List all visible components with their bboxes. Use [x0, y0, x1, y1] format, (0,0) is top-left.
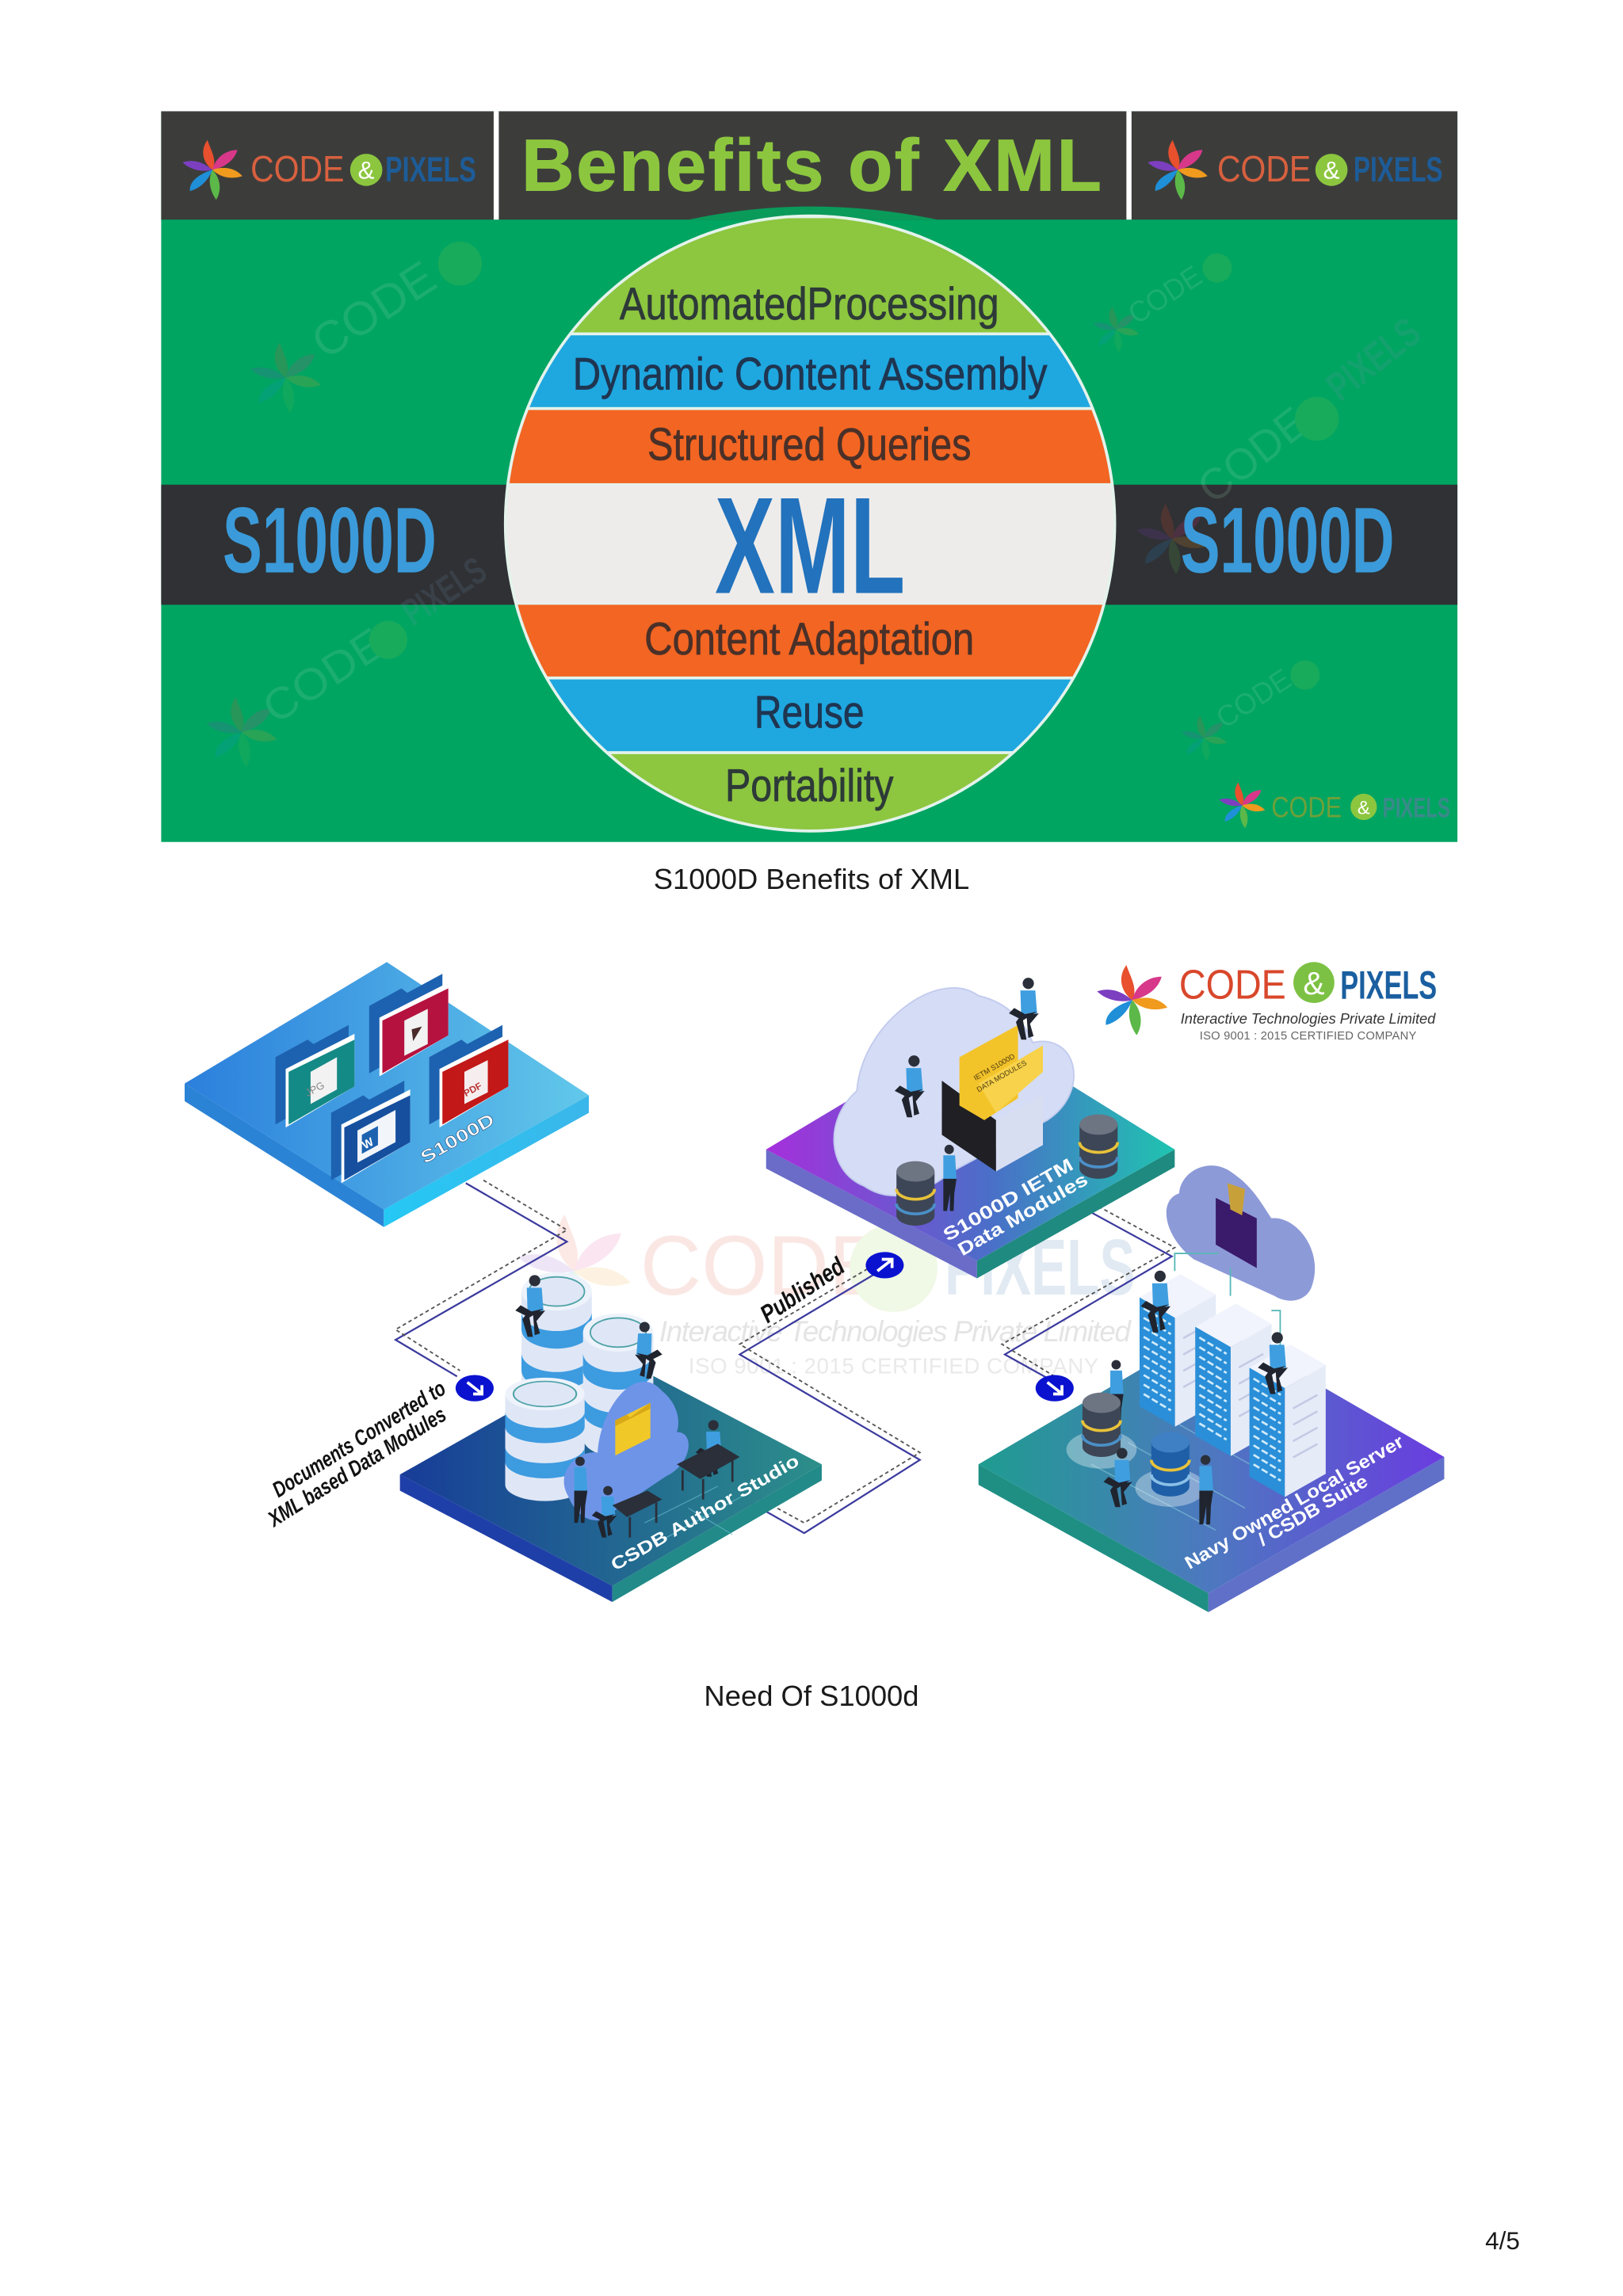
- glow under databases: [1067, 1431, 1205, 1507]
- person: standing: [943, 1145, 957, 1211]
- label: documents converted: XML based Data Modules: [262, 1402, 450, 1532]
- person: seated on database: [515, 1275, 545, 1337]
- logo: Code and Pixels: &: [1303, 965, 1325, 1001]
- icon: PDF folder: PDF: [462, 1080, 483, 1099]
- label: documents converted: Documents Converted to: [268, 1375, 450, 1502]
- watermarks on green: CODE: [1122, 259, 1208, 330]
- database: dark: [1083, 1393, 1121, 1457]
- platform: Navy Owned Local Server: [979, 1165, 1444, 1612]
- filing cabinet with data modules: IETM S1000D: [972, 1052, 1017, 1082]
- watermark: company logo: CODE: [640, 1218, 885, 1313]
- platform label: Navy server: Navy Owned Local Server: [1181, 1431, 1407, 1573]
- stripe: Automated Processing: [573, 218, 1047, 333]
- logo: banner bottom right: CODE: [1271, 791, 1342, 823]
- arrow badge: published: [865, 1252, 903, 1278]
- platform: CSDB Author Studio: [400, 1272, 822, 1602]
- logo: banner bottom right: [1220, 783, 1450, 828]
- database stack: back left: [521, 1272, 592, 1416]
- person: top of cloud: [1009, 978, 1039, 1039]
- platform label: CSDB Author Studio: CSDB Author Studio: [607, 1451, 803, 1574]
- watermarks on green: CODE: [254, 618, 394, 733]
- logo: banner bottom right: &: [1358, 798, 1370, 819]
- label: Portability: Portability: [725, 761, 894, 811]
- platform: S1000D source documents: [185, 962, 589, 1227]
- platform label: S1000D: S1000D: [417, 1109, 498, 1168]
- stripe: Structured Queries: [498, 410, 1128, 483]
- label: Reuse: Reuse: [754, 688, 865, 738]
- logo: Code and Pixels: CODE: [1179, 961, 1286, 1007]
- watermarks on green: CODE: [1189, 398, 1317, 513]
- arrow badge: into Navy server: [1036, 1375, 1074, 1402]
- stripe: Content Adaptation: [498, 605, 1128, 677]
- logo: header left: PIXELS: [385, 151, 476, 189]
- caption: Need Of S1000d: Need Of S1000d: [704, 1680, 919, 1712]
- icon: video folder: [369, 974, 449, 1076]
- person: on tower 1: [1140, 1271, 1170, 1333]
- person: left on cloud: [895, 1055, 925, 1117]
- panel: S1000D process diagram: [185, 961, 1444, 1612]
- navy cloud with emblem: [1167, 1165, 1315, 1301]
- circuit traces: [644, 1486, 747, 1538]
- watermark: company logo: Interactive Technologies Private Limited: [659, 1315, 1132, 1348]
- watermarks on green: [207, 242, 1429, 767]
- logo: header right: &: [1323, 156, 1340, 184]
- watermarks on green: PIXELS: [1317, 308, 1429, 410]
- logo: Code and Pixels: ISO 9001 : 2015 CERTIFIED COMPANY: [1200, 1030, 1416, 1043]
- stripe: Reuse: [549, 680, 1071, 751]
- logo: Code and Pixels: PIXELS: [1340, 963, 1437, 1007]
- icon: JPG folder: JPG: [304, 1079, 327, 1099]
- label: S1000D left: S1000D: [223, 489, 437, 593]
- logo: header left: [182, 140, 476, 200]
- server tower 2: [1195, 1303, 1271, 1456]
- logo: header right: [1148, 140, 1443, 200]
- logo: header right: CODE: [1217, 148, 1311, 189]
- icon: JPG folder: [276, 1025, 354, 1127]
- person: seated front: [1103, 1447, 1132, 1507]
- arrow badge: into CSDB: [456, 1375, 494, 1402]
- database stack: back right: [583, 1314, 653, 1457]
- panel: benefits of XML banner: [161, 111, 1457, 842]
- cloud to server links: [1174, 1253, 1280, 1347]
- stripe: Portability: [610, 754, 1010, 830]
- cloud with folder: [564, 1382, 689, 1520]
- watermark: company logo: ISO 9001 : 2015 CERTIFIED COMPANY: [689, 1354, 1098, 1379]
- label: published: Published: [755, 1252, 850, 1329]
- person: at desk right: [677, 1420, 739, 1500]
- label: Content Adaptation: Content Adaptation: [644, 614, 974, 665]
- label: S1000D right: S1000D: [1181, 489, 1395, 593]
- logo: banner bottom right: PIXELS: [1383, 792, 1450, 823]
- header bar: [161, 111, 1457, 219]
- person: standing: [575, 1457, 587, 1523]
- label: XML: XML: [715, 469, 905, 623]
- database: dark front: [896, 1161, 934, 1226]
- watermark: company logo: [518, 1215, 1135, 1379]
- platform label: Navy server: / CSDB Suite: [1254, 1470, 1371, 1550]
- logo: Code and Pixels: Interactive Technologies Private Limited: [1181, 1010, 1436, 1027]
- connection traces: [1091, 1421, 1289, 1530]
- stripe: centre band: [498, 485, 1128, 603]
- person: standing back: [1110, 1360, 1124, 1426]
- logo: header right: PIXELS: [1354, 151, 1443, 189]
- logo: Code and Pixels: [1097, 961, 1437, 1043]
- connector: IETM to Navy server: [1002, 1207, 1174, 1384]
- connector: CSDB to IETM (published): [739, 1262, 920, 1533]
- dark S1000D band: [161, 485, 1457, 605]
- stripe: Dynamic Content Assembly: [529, 335, 1090, 407]
- person: laptop user: [635, 1322, 663, 1379]
- watermarks on green: CODE: [1210, 662, 1296, 734]
- person: standing front: [1199, 1455, 1213, 1524]
- person: on tower 3: [1258, 1332, 1288, 1394]
- connector: S1000D to CSDB: [395, 1180, 567, 1376]
- icon: Word folder: [331, 1081, 411, 1183]
- platform label: IETM: Data Modules: [954, 1169, 1091, 1260]
- watermarks on green: CODE: [302, 250, 445, 369]
- logo: header left: &: [358, 156, 375, 184]
- platform label: IETM: [939, 1154, 1091, 1260]
- XML benefits circle: [498, 215, 1128, 834]
- icon: Word folder: W: [361, 1136, 376, 1152]
- server tower 1: [1140, 1274, 1216, 1427]
- caption: S1000D Benefits of XML: S1000D Benefits of XML: [654, 863, 969, 895]
- platform: S1000D IETM Data Modules: [766, 978, 1174, 1278]
- platform label: IETM: S1000D IETM: [939, 1154, 1076, 1245]
- watermarks on green: PIXELS: [395, 549, 494, 634]
- label: Automated Processing: AutomatedProcessing: [620, 279, 999, 330]
- filing cabinet with data modules: [941, 1025, 1043, 1172]
- watermark: company logo: PIXELS: [945, 1224, 1135, 1312]
- person: at desk front: [592, 1486, 662, 1538]
- label: Structured Queries: Structured Queries: [647, 419, 971, 470]
- database stack: front: [506, 1378, 585, 1501]
- large cloud: [834, 988, 1074, 1196]
- icon: PDF folder: [430, 1025, 508, 1127]
- filing cabinet with data modules: DATA MODULES: [976, 1058, 1028, 1093]
- server tower 3: [1250, 1344, 1326, 1497]
- page number: 4/5: [1485, 2227, 1520, 2255]
- database: dark red: [1079, 1114, 1117, 1179]
- label: Dynamic Content Assembly: Dynamic Content Assembly: [573, 349, 1048, 400]
- arc behind circle top: [689, 207, 938, 219]
- logo: header left: CODE: [250, 148, 344, 189]
- database: blue: [1151, 1432, 1190, 1497]
- title: Benefits of XML: [521, 124, 1102, 206]
